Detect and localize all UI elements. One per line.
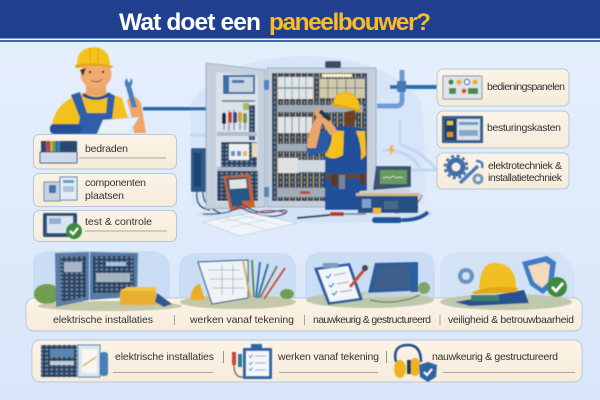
card: componenten plaatsen: plaatsen <box>85 190 124 202</box>
scene: tekening <box>180 260 296 309</box>
scene: veiligheid, helmet and shield <box>440 256 572 310</box>
label: werken vanaf tekening: werken vanaf tekening <box>277 351 379 363</box>
title: Wat doet een <box>119 9 261 36</box>
icon: control cabinet <box>442 116 483 143</box>
label: elektrische installaties: elektrische installaties <box>53 314 153 326</box>
icon: cabinet and drawing <box>41 345 108 377</box>
ground shadow <box>197 205 433 223</box>
header banner <box>0 0 600 42</box>
label: besturingskasten <box>487 122 561 134</box>
card: elektrotechniek en installatietechniek: installatietechniek <box>488 172 563 184</box>
yellow helmet <box>75 47 113 68</box>
scene: installaties <box>34 252 182 311</box>
icon: clipboard and probes <box>232 344 272 379</box>
neck and head <box>80 59 112 100</box>
blueprint sheet <box>97 117 139 134</box>
label: test & controle <box>85 216 152 228</box>
cabinet door <box>206 63 265 209</box>
scene: nauwkeurig, checklist and laptop <box>306 262 434 308</box>
card: bedraden <box>34 134 176 169</box>
label: bedieningspanelen <box>487 81 565 93</box>
card: elektrotechniek en installatietechniek <box>437 153 569 189</box>
card: besturingskasten <box>437 111 569 148</box>
label: werken vanaf tekening: werken vanaf tekening <box>189 314 294 326</box>
cabinet body and interior <box>264 61 376 207</box>
card: test en controle <box>34 210 176 242</box>
background blob with pipes <box>143 56 437 205</box>
body <box>52 92 128 134</box>
overalls <box>71 92 118 134</box>
wiring drawing sheet <box>203 213 297 236</box>
arm and raised hand <box>127 97 146 133</box>
banner: top row <box>26 298 582 331</box>
card: bedieningspanelen <box>437 69 569 106</box>
card: componenten plaatsen <box>34 174 176 206</box>
label: componenten <box>85 177 146 189</box>
electrician figure <box>306 92 367 210</box>
icon: tester with check <box>43 213 82 239</box>
multimeter <box>203 174 287 216</box>
arm sleeve <box>50 124 81 134</box>
tools on table <box>297 195 428 223</box>
icon: control panel <box>443 76 482 99</box>
label: bedraden <box>85 143 128 155</box>
label: elektrotechniek & <box>488 160 562 172</box>
label: nauwkeurig en gestructureerd: nauwkeurig & gestructureerd <box>313 314 431 326</box>
title: paneelbouwer? <box>269 9 431 36</box>
banner: bottom row <box>32 340 582 382</box>
label: nauwkeurig en gestructureerd: nauwkeurig & gestructureerd <box>432 351 558 363</box>
wrench <box>125 78 137 108</box>
left device <box>191 148 220 213</box>
laptop on workbench <box>356 166 420 214</box>
divider <box>223 351 224 363</box>
label: veiligheid en betrouwbaarheid: veiligheid & betrouwbaarheid <box>448 314 574 326</box>
icon: gears and wrench <box>445 156 482 183</box>
label: elektrische installaties: elektrische installaties <box>115 351 214 363</box>
icon: ear protection with shield <box>394 345 437 382</box>
centre illustration: electrician at control cabinet <box>143 56 437 236</box>
icon: wiring terminal <box>40 141 77 163</box>
worker with wrench and drawing <box>50 47 146 134</box>
divider <box>386 351 387 363</box>
icon: components <box>44 177 77 201</box>
scene backdrops <box>33 251 575 300</box>
